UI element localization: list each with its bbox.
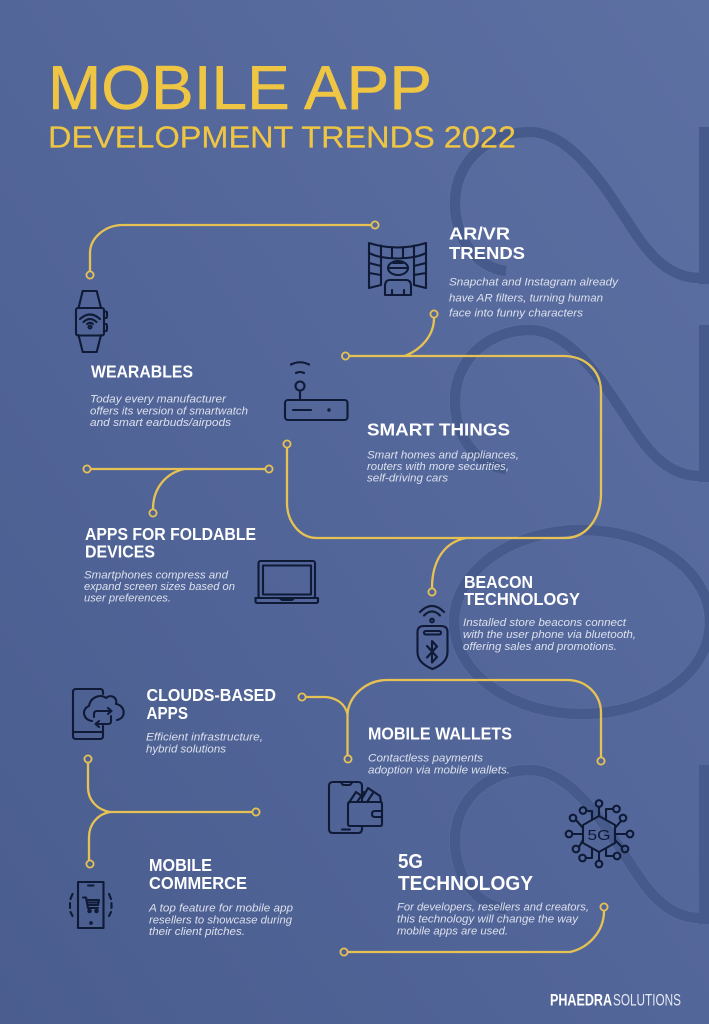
body text: resellers to showcase during (149, 914, 293, 926)
body text (84, 569, 235, 605)
heading: APPS FOR FOLDABLE (85, 524, 256, 544)
title: MOBILE APP (48, 54, 432, 123)
body text: and smart earbuds/airpods (90, 417, 232, 429)
heading: BEACON (464, 572, 533, 592)
heading: CLOUDS-BASED (146, 685, 276, 705)
heading: SMART THINGS (367, 420, 510, 440)
body text: Smart homes and appliances, (367, 449, 519, 461)
panel: beacon technology (418, 572, 636, 669)
body text: self-driving cars (367, 473, 449, 485)
body text (146, 732, 263, 755)
panel: wearables (76, 291, 248, 429)
panel: clouds-based apps: APPS (146, 703, 188, 723)
body text: this technology will change the way (397, 914, 580, 926)
panel: apps for foldable devices (84, 524, 318, 605)
heading: 5G (398, 851, 423, 873)
panel: AR/VR trends: TRENDS (449, 243, 525, 263)
body text: Today every manufacturer (90, 394, 227, 406)
body text: with the user phone via bluetooth, (463, 629, 636, 641)
body text: A top feature for mobile app (148, 903, 293, 915)
icon: shopping phone (70, 882, 112, 928)
panel: 5G technology (397, 800, 633, 937)
body text: offering sales and promotions. (463, 641, 617, 653)
logo (550, 992, 681, 1010)
icon: bluetooth beacon (418, 606, 448, 669)
panel: AR/VR trends (369, 224, 620, 320)
panel: mobile commerce: COMMERCE (149, 873, 247, 893)
body text (148, 903, 293, 938)
heading: WEARABLES (91, 362, 193, 382)
body text: Snapchat and Instagram already (449, 277, 620, 289)
body text: Efficient infrastructure, (146, 732, 263, 744)
logo: SOLUTIONS (613, 992, 681, 1010)
connector: clouds and mobile commerce (84, 755, 260, 868)
body text: routers with more securities, (367, 461, 509, 473)
body text (449, 277, 620, 320)
body text: have AR filters, turning human (449, 293, 603, 305)
icon: 5G chip: 5G (588, 827, 610, 844)
panel: apps for foldable devices: DEVICES (85, 542, 155, 562)
heading: MOBILE (149, 855, 212, 875)
icon: AR/VR screen (369, 243, 426, 295)
panel: beacon technology: TECHNOLOGY (464, 589, 580, 609)
title (48, 54, 516, 154)
icon: 5G chip (566, 800, 633, 867)
connector: AR/VR and smart things loop (283, 310, 601, 596)
background watermark shapes (454, 127, 709, 924)
logo: PHAEDRA (550, 992, 612, 1010)
body text: mobile apps are used. (397, 925, 508, 937)
body text: expand screen sizes based on (84, 581, 235, 593)
body text: adoption via mobile wallets. (368, 764, 510, 776)
panel: clouds-based apps (73, 685, 276, 755)
connector: 5G bottom (340, 903, 608, 956)
connector: foldable devices (83, 465, 273, 517)
body text: Smartphones compress and (84, 569, 229, 581)
icon: cloud tablet (73, 689, 124, 739)
panel: smart things (285, 362, 519, 485)
body text: their client pitches. (149, 926, 245, 938)
body text: Installed store beacons connect (463, 617, 627, 629)
title: DEVELOPMENT TRENDS 2022 (48, 120, 516, 154)
body text (397, 902, 589, 937)
heading: MOBILE WALLETS (368, 723, 512, 743)
icon: laptop (256, 561, 318, 603)
body text: Contactless payments (368, 752, 484, 764)
body text (368, 752, 510, 776)
body text: user preferences. (84, 593, 171, 605)
body text (90, 394, 248, 429)
connector: wearables to AR/VR (86, 221, 379, 279)
body text: hybrid solutions (146, 743, 227, 755)
icon: smartwatch (76, 291, 107, 352)
body text (367, 449, 519, 485)
icon: router (285, 362, 348, 420)
body text (463, 617, 636, 653)
heading: AR/VR (449, 224, 510, 244)
panel: mobile commerce (70, 855, 293, 938)
body text: For developers, resellers and creators, (397, 902, 589, 914)
connector: mobile wallets and 5G (298, 680, 605, 765)
body text: offers its version of smartwatch (90, 405, 248, 417)
body text: face into funny characters (449, 308, 584, 320)
panel: mobile wallets (329, 723, 512, 833)
panel: 5G technology: TECHNOLOGY (398, 873, 534, 895)
icon: phone wallet (329, 782, 382, 833)
